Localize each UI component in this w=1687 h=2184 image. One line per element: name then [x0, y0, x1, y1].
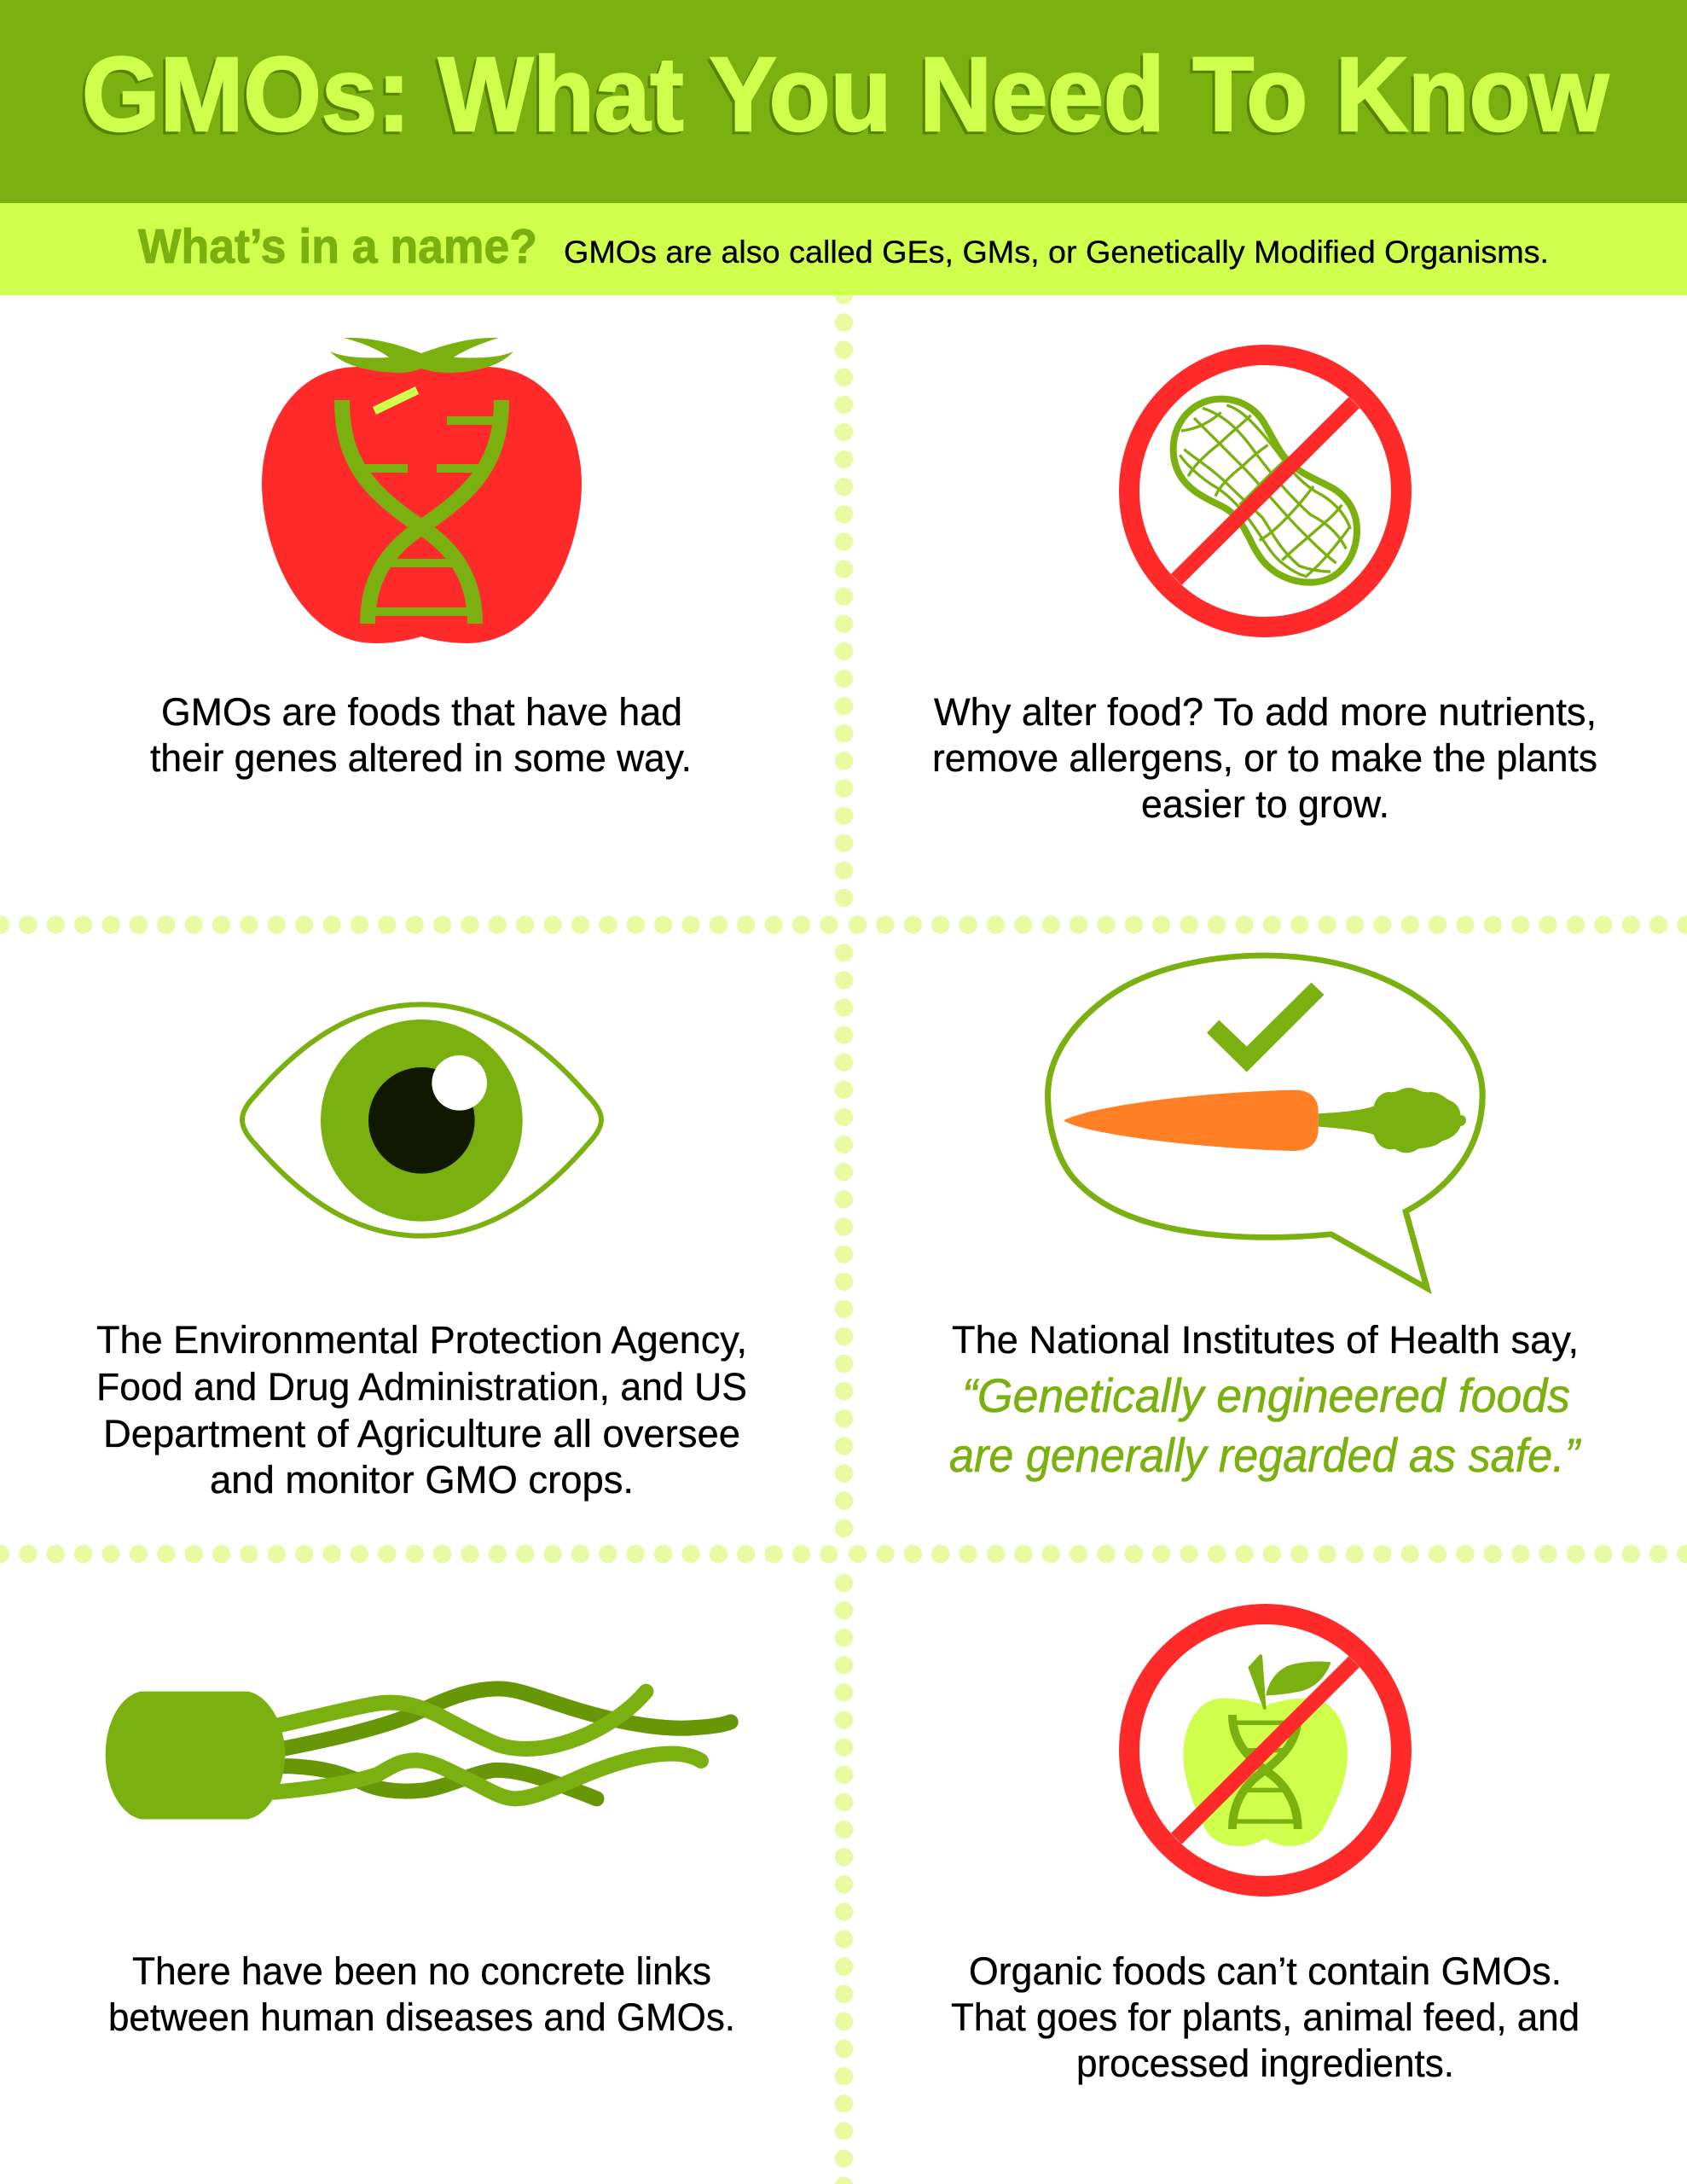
panel: oversight	[96, 1004, 747, 1502]
icon: bacterium	[106, 1688, 731, 1819]
text: why alter food: remove allergens, or to make the plants	[932, 736, 1597, 780]
panel: what GMOs are	[150, 338, 692, 780]
text: why alter food: easier to grow.	[1141, 782, 1389, 826]
text: definition	[150, 690, 692, 780]
text: definition: their genes altered in some way.	[150, 736, 692, 780]
text: organic foods: Organic foods can’t contain GMOs.	[969, 1949, 1562, 1993]
subtitle text: GMOs are also called GEs, GMs, or Genetically Modified Organisms.	[564, 235, 1549, 270]
text: agencies: and monitor GMO crops.	[210, 1458, 634, 1502]
icon: peanut prohibited	[1129, 355, 1401, 627]
text: no concrete links: between human diseases and GMOs.	[108, 1995, 735, 2039]
text: agencies: Food and Drug Administration, and US	[96, 1365, 747, 1409]
pull quote	[949, 1368, 1581, 1482]
text: no concrete links: There have been no concrete links	[132, 1949, 711, 1993]
text: agencies: The Environmental Protection Agency,	[96, 1318, 747, 1362]
pull quote: “Genetically engineered foods	[962, 1368, 1570, 1422]
text: no concrete links	[108, 1949, 735, 2039]
text: organic foods: That goes for plants, animal feed, and	[951, 1995, 1580, 2039]
text: organic foods	[951, 1949, 1580, 2085]
subtitle band	[0, 203, 1687, 295]
subtitle heading: What’s in a name?	[138, 219, 537, 274]
text: organic foods: processed ingredients.	[1076, 2042, 1454, 2085]
text: NIH statement: The National Institutes of Health say,	[952, 1318, 1579, 1362]
text: why alter food	[932, 690, 1597, 826]
pull quote: are generally regarded as safe.”	[949, 1428, 1581, 1482]
panel: why alter food	[932, 355, 1597, 826]
text: why alter food: Why alter food? To add more nutrients,	[934, 690, 1597, 734]
panel: safety quote	[949, 956, 1581, 1482]
icon: tomato with DNA	[262, 338, 582, 643]
panel: organic foods	[951, 1614, 1580, 2085]
text: definition: GMOs are foods that have had	[161, 690, 682, 734]
text: agencies: Department of Agriculture all oversee	[103, 1412, 740, 1455]
icon: speech bubble with carrot	[1048, 956, 1482, 1288]
title: GMOs: What You Need To Know	[82, 37, 1609, 154]
text: agencies	[96, 1318, 747, 1502]
panel: no disease links	[106, 1688, 735, 2039]
icon: apple with DNA prohibited	[1129, 1614, 1401, 1886]
icon: eye	[242, 1004, 601, 1236]
header banner	[0, 0, 1687, 203]
